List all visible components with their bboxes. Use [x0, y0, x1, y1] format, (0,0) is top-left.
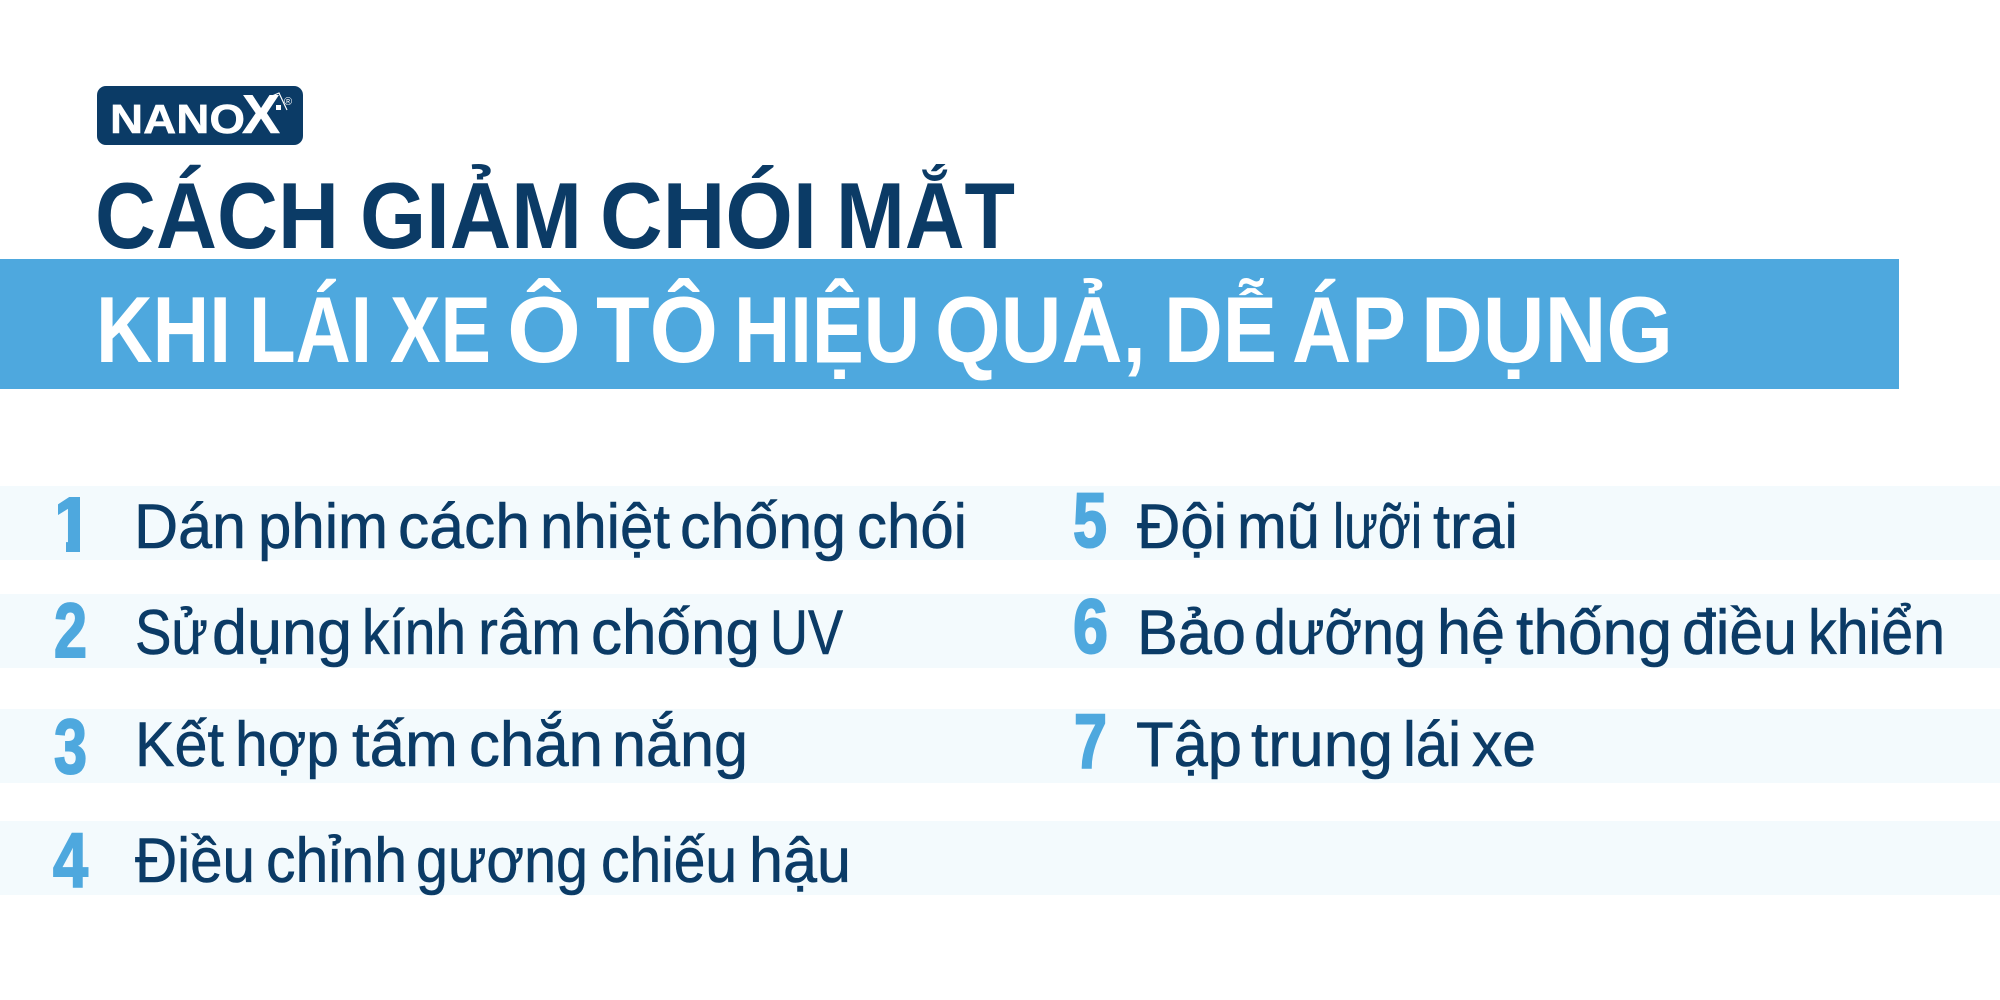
heading: first title line: CÁCH — [95, 163, 339, 268]
heading banner: second title line: TÔ — [596, 277, 718, 382]
heading banner: second title line: QUẢ, — [935, 277, 1146, 382]
list item 3: tấm — [352, 710, 458, 780]
list item 6: điều — [1682, 598, 1797, 668]
list item 4: chiếu — [601, 826, 737, 896]
list item 4: Điều — [135, 826, 255, 896]
list item 5: 5 — [1073, 478, 1107, 564]
list item 1: cách — [398, 492, 530, 562]
list item 4: gương — [416, 826, 588, 896]
list item 1: chống — [680, 492, 846, 562]
list item 2: râm — [478, 598, 581, 668]
heading banner: second title line: Ô — [507, 277, 581, 382]
heading banner: second title line — [0, 259, 1899, 389]
list item 5: Đội — [1137, 492, 1227, 562]
list item 6: 6 — [1073, 584, 1108, 670]
list item 5: lưỡi — [1333, 492, 1422, 562]
logo badge: NanoX: ® — [284, 96, 292, 108]
list item 6: thống — [1516, 598, 1672, 668]
heading: first title line: GIẢM — [360, 163, 582, 268]
list item 3: chắn — [469, 710, 603, 780]
logo badge: NanoX: X — [242, 83, 280, 145]
list item 1: 1 — [51, 482, 94, 568]
list item 6: dưỡng — [1254, 598, 1426, 668]
list item 7: trung — [1251, 710, 1393, 780]
list item 3: nắng — [612, 710, 748, 780]
heading banner: second title line: LÁI — [249, 277, 372, 382]
list item 1: phim — [258, 492, 388, 562]
heading banner: second title line: ÁP — [1292, 277, 1406, 382]
list item 7: Tập — [1136, 710, 1242, 780]
list item 1 — [0, 486, 1000, 562]
heading banner: second title line: DỄ — [1164, 277, 1277, 382]
heading: first title line — [95, 162, 1015, 268]
list item 4: chỉnh — [266, 826, 407, 896]
list item 3: 3 — [54, 704, 87, 790]
list item 1: nhiệt — [540, 492, 670, 562]
heading banner: second title line: XE — [390, 277, 491, 382]
list item 6: khiển — [1808, 598, 1945, 668]
list item 2: dụng — [212, 598, 352, 668]
heading banner: second title line: HIỆU — [734, 277, 920, 382]
list item 2: 2 — [54, 588, 87, 674]
list item 7: lái — [1403, 710, 1461, 780]
list item 1: Dán — [134, 492, 246, 562]
logo badge: NanoX: NANO — [110, 96, 245, 142]
list item 5: mũ — [1237, 492, 1320, 562]
list item 3: Kết — [135, 710, 224, 780]
list item 5 — [1000, 478, 2000, 564]
list item 7: 7 — [1074, 699, 1107, 785]
list item 4: hậu — [749, 826, 851, 896]
heading banner: second title line: KHI — [96, 277, 231, 382]
list item 5: trai — [1433, 492, 1518, 562]
list item 6 — [1000, 584, 2000, 670]
list item 7 — [1000, 699, 2000, 785]
list item 6: hệ — [1437, 598, 1505, 668]
list item 3: hợp — [235, 710, 339, 780]
heading: first title line: MẮT — [836, 162, 1015, 268]
list item 6: Bảo — [1137, 598, 1246, 668]
heading: first title line: CHÓI — [600, 163, 817, 268]
list item 2: chống — [591, 598, 760, 668]
list item 2: Sử — [135, 598, 208, 668]
list item 1: chói — [857, 492, 967, 562]
list item 2 — [0, 588, 2000, 674]
list item 2: UV — [770, 598, 843, 668]
list item 4 — [0, 818, 2000, 904]
heading banner: second title line: DỤNG — [1421, 277, 1673, 382]
list item 3 — [0, 704, 2000, 790]
list item 4: 4 — [53, 818, 88, 904]
list item 2: kính — [362, 598, 466, 668]
list item 7: xe — [1472, 710, 1536, 780]
logo badge: NanoX — [97, 83, 303, 145]
